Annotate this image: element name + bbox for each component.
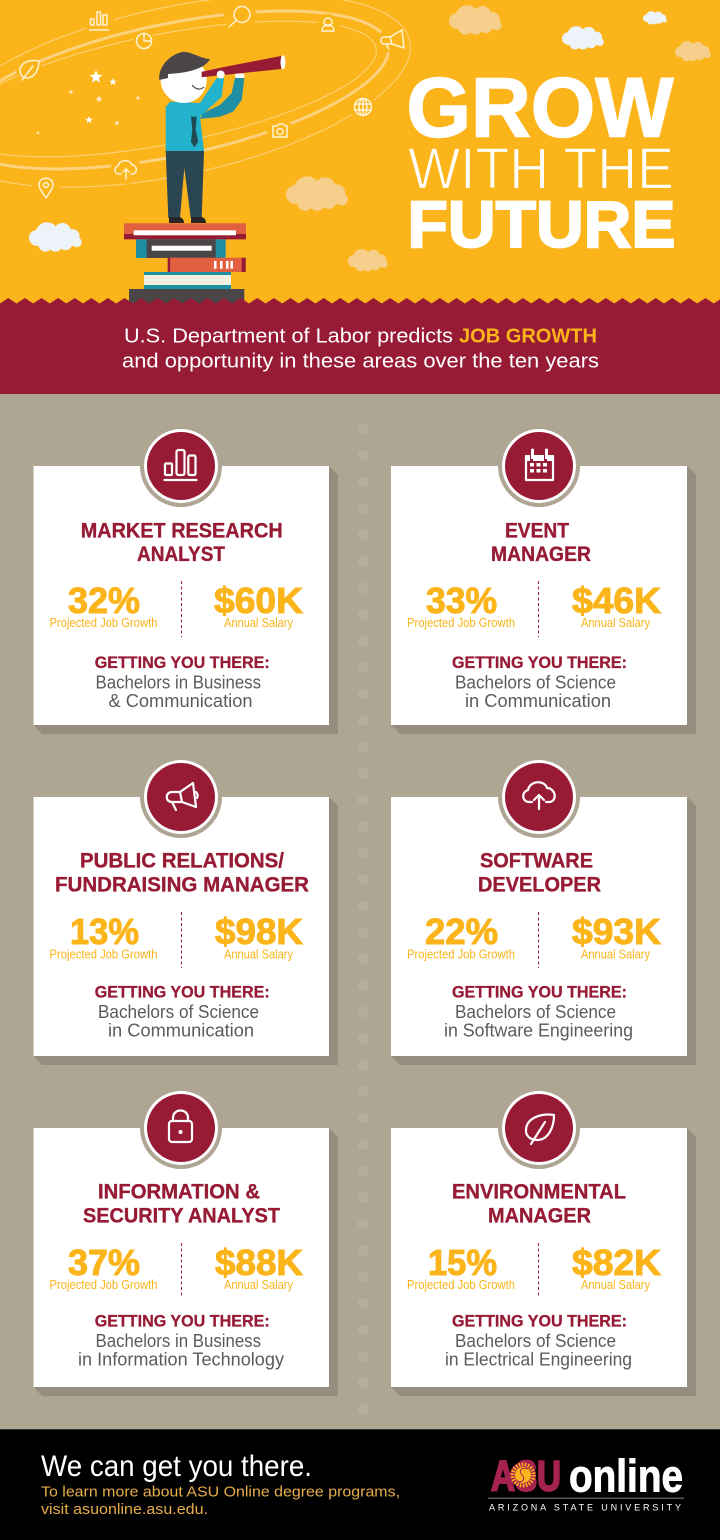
panel: information security analyst: $88K: [215, 1242, 303, 1283]
logo: asu online: ASU: [491, 1452, 561, 1500]
panel: software developer: $93K: [572, 911, 661, 952]
title: FUTURE: [408, 187, 676, 261]
panel: software developer: Annual Salary: [581, 948, 651, 962]
panel: event manager: EVENT: [505, 519, 569, 542]
panel: information security analyst: Annual Salary: [224, 1278, 294, 1292]
footer text: [41, 1450, 400, 1518]
panel: information security analyst: Projected Job Growth: [50, 1278, 158, 1292]
illustration: man with telescope: [159, 52, 286, 223]
panel: market research analyst: 32%: [68, 580, 140, 621]
panel: environmental manager: ENVIRONMENTAL: [452, 1180, 626, 1204]
panel: information security analyst: Bachelors in Business: [96, 1331, 261, 1351]
head: [161, 57, 207, 103]
panel: event manager: GETTING YOU THERE:: [452, 654, 627, 672]
panel: environmental manager: Projected Job Growth: [407, 1278, 515, 1292]
panel: event manager: $46K: [572, 580, 661, 621]
panel: information security analyst: 37%: [68, 1242, 140, 1283]
panel: information security analyst: [34, 1087, 338, 1396]
panel: information security analyst: in Information Technology: [78, 1350, 284, 1370]
panel: environmental manager: GETTING YOU THERE:: [452, 1312, 627, 1330]
clouds: [29, 5, 711, 271]
icon: calendar: [526, 448, 554, 480]
shirt: [166, 78, 224, 151]
telescope: [202, 56, 281, 77]
panel: market research analyst: GETTING YOU THERE:: [95, 654, 270, 672]
shoes: [169, 217, 206, 223]
icon: megaphone: [167, 783, 198, 810]
hands: [217, 70, 225, 78]
panel: software developer: SOFTWARE: [480, 850, 593, 872]
panel: event manager: Projected Job Growth: [407, 616, 515, 630]
logo: asu online: ARIZONA STATE UNIVERSITY: [489, 1503, 681, 1513]
banner text: JOB GROWTH: [459, 325, 597, 348]
panel: software developer: GETTING YOU THERE:: [452, 984, 627, 1002]
panel: market research analyst: ANALYST: [137, 543, 225, 566]
panel: software developer: Bachelors of Science: [455, 1002, 616, 1022]
panel: public relations manager: in Communication: [108, 1020, 254, 1040]
logo: asu online: [488, 1451, 684, 1513]
panel: market research analyst: Bachelors in Business: [96, 672, 261, 692]
panel: public relations manager: GETTING YOU THERE:: [95, 984, 270, 1002]
panel: environmental manager: MANAGER: [488, 1204, 591, 1228]
panel: event manager: [391, 425, 696, 734]
panel: information security analyst: GETTING YOU THERE:: [95, 1312, 270, 1330]
panel: public relations manager: 13%: [70, 911, 139, 952]
icon: upload cloud: [523, 782, 555, 809]
panel: event manager: 33%: [426, 580, 497, 621]
hair: [159, 52, 210, 80]
panel: environmental manager: 15%: [428, 1242, 497, 1283]
trousers: [166, 151, 204, 218]
panel: software developer: [391, 756, 696, 1065]
icon: user: [317, 14, 339, 36]
centre dotted line: [358, 429, 369, 1410]
panel: market research analyst: Projected Job Growth: [50, 616, 158, 630]
icon: upload cloud: [111, 154, 141, 184]
banner text: and opportunity in these areas over the ten years: [122, 350, 599, 373]
icon: header megaphone: [379, 27, 405, 53]
panel: market research analyst: & Communication: [108, 691, 252, 711]
panel: public relations manager: $98K: [215, 911, 303, 952]
icon: bar chart: [164, 450, 196, 480]
icon: magnifier: [224, 0, 256, 32]
panel: public relations manager: Projected Job Growth: [50, 948, 158, 962]
footer text: We can get you there.: [41, 1450, 312, 1483]
footer: [0, 1429, 720, 1540]
panel: information security analyst: INFORMATION &: [98, 1180, 260, 1204]
title: WITH THE: [408, 137, 674, 202]
panel: public relations manager: Bachelors of Science: [98, 1002, 259, 1022]
banner text: U.S. Department of Labor predicts: [124, 325, 453, 348]
panel: market research analyst: MARKET RESEARCH: [81, 519, 283, 542]
illustration: stack of books: [124, 223, 246, 305]
panel: event manager: MANAGER: [491, 543, 591, 566]
panel: environmental manager: in Electrical Engineering: [445, 1350, 632, 1370]
panel: environmental manager: Annual Salary: [581, 1278, 651, 1292]
footer text: visit asuonline.asu.edu.: [41, 1501, 208, 1518]
panel: environmental manager: [391, 1087, 696, 1396]
logo: asu online: online: [569, 1451, 683, 1502]
panel: public relations manager: [34, 756, 338, 1065]
orbit lines: [0, 0, 427, 223]
panel: environmental manager: Bachelors of Science: [455, 1331, 616, 1351]
icon: camera: [267, 118, 293, 144]
icon: bar chart: [84, 5, 114, 35]
title: GROW: [406, 60, 674, 154]
banner: [0, 298, 720, 394]
panel: software developer: 22%: [425, 911, 498, 952]
title: [406, 60, 676, 261]
panel: event manager: Bachelors of Science: [455, 672, 616, 692]
icon: header leaf: [16, 56, 42, 82]
panel: market research analyst: [34, 425, 338, 734]
panel: event manager: Annual Salary: [581, 616, 651, 630]
far arm: [200, 78, 244, 119]
panel: environmental manager: $82K: [572, 1242, 661, 1283]
panel: public relations manager: PUBLIC RELATIONS/: [80, 850, 284, 872]
tie: [191, 117, 198, 147]
icon: leaf: [526, 1115, 554, 1144]
panel: public relations manager: FUNDRAISING MANAGER: [55, 874, 309, 896]
banner text: [122, 325, 599, 373]
panel: software developer: DEVELOPER: [478, 874, 601, 896]
main background: [0, 394, 720, 1429]
panel: software developer: Projected Job Growth: [407, 948, 515, 962]
panel: market research analyst: Annual Salary: [224, 616, 294, 630]
panel: market research analyst: $60K: [214, 580, 303, 621]
header background: [0, 0, 720, 304]
orbit icons: [16, 0, 405, 202]
stars: [36, 70, 141, 135]
footer text: To learn more about ASU Online degree programs,: [41, 1484, 400, 1501]
panel: software developer: in Software Engineering: [444, 1020, 633, 1040]
panel: event manager: in Communication: [465, 691, 611, 711]
icon: pie chart: [133, 30, 155, 52]
smile: [192, 85, 204, 89]
panel: public relations manager: Annual Salary: [224, 948, 294, 962]
panel: information security analyst: SECURITY ANALYST: [83, 1204, 280, 1228]
icon: location pin: [32, 174, 60, 202]
icon: padlock: [169, 1110, 192, 1142]
icon: globe: [350, 94, 376, 120]
